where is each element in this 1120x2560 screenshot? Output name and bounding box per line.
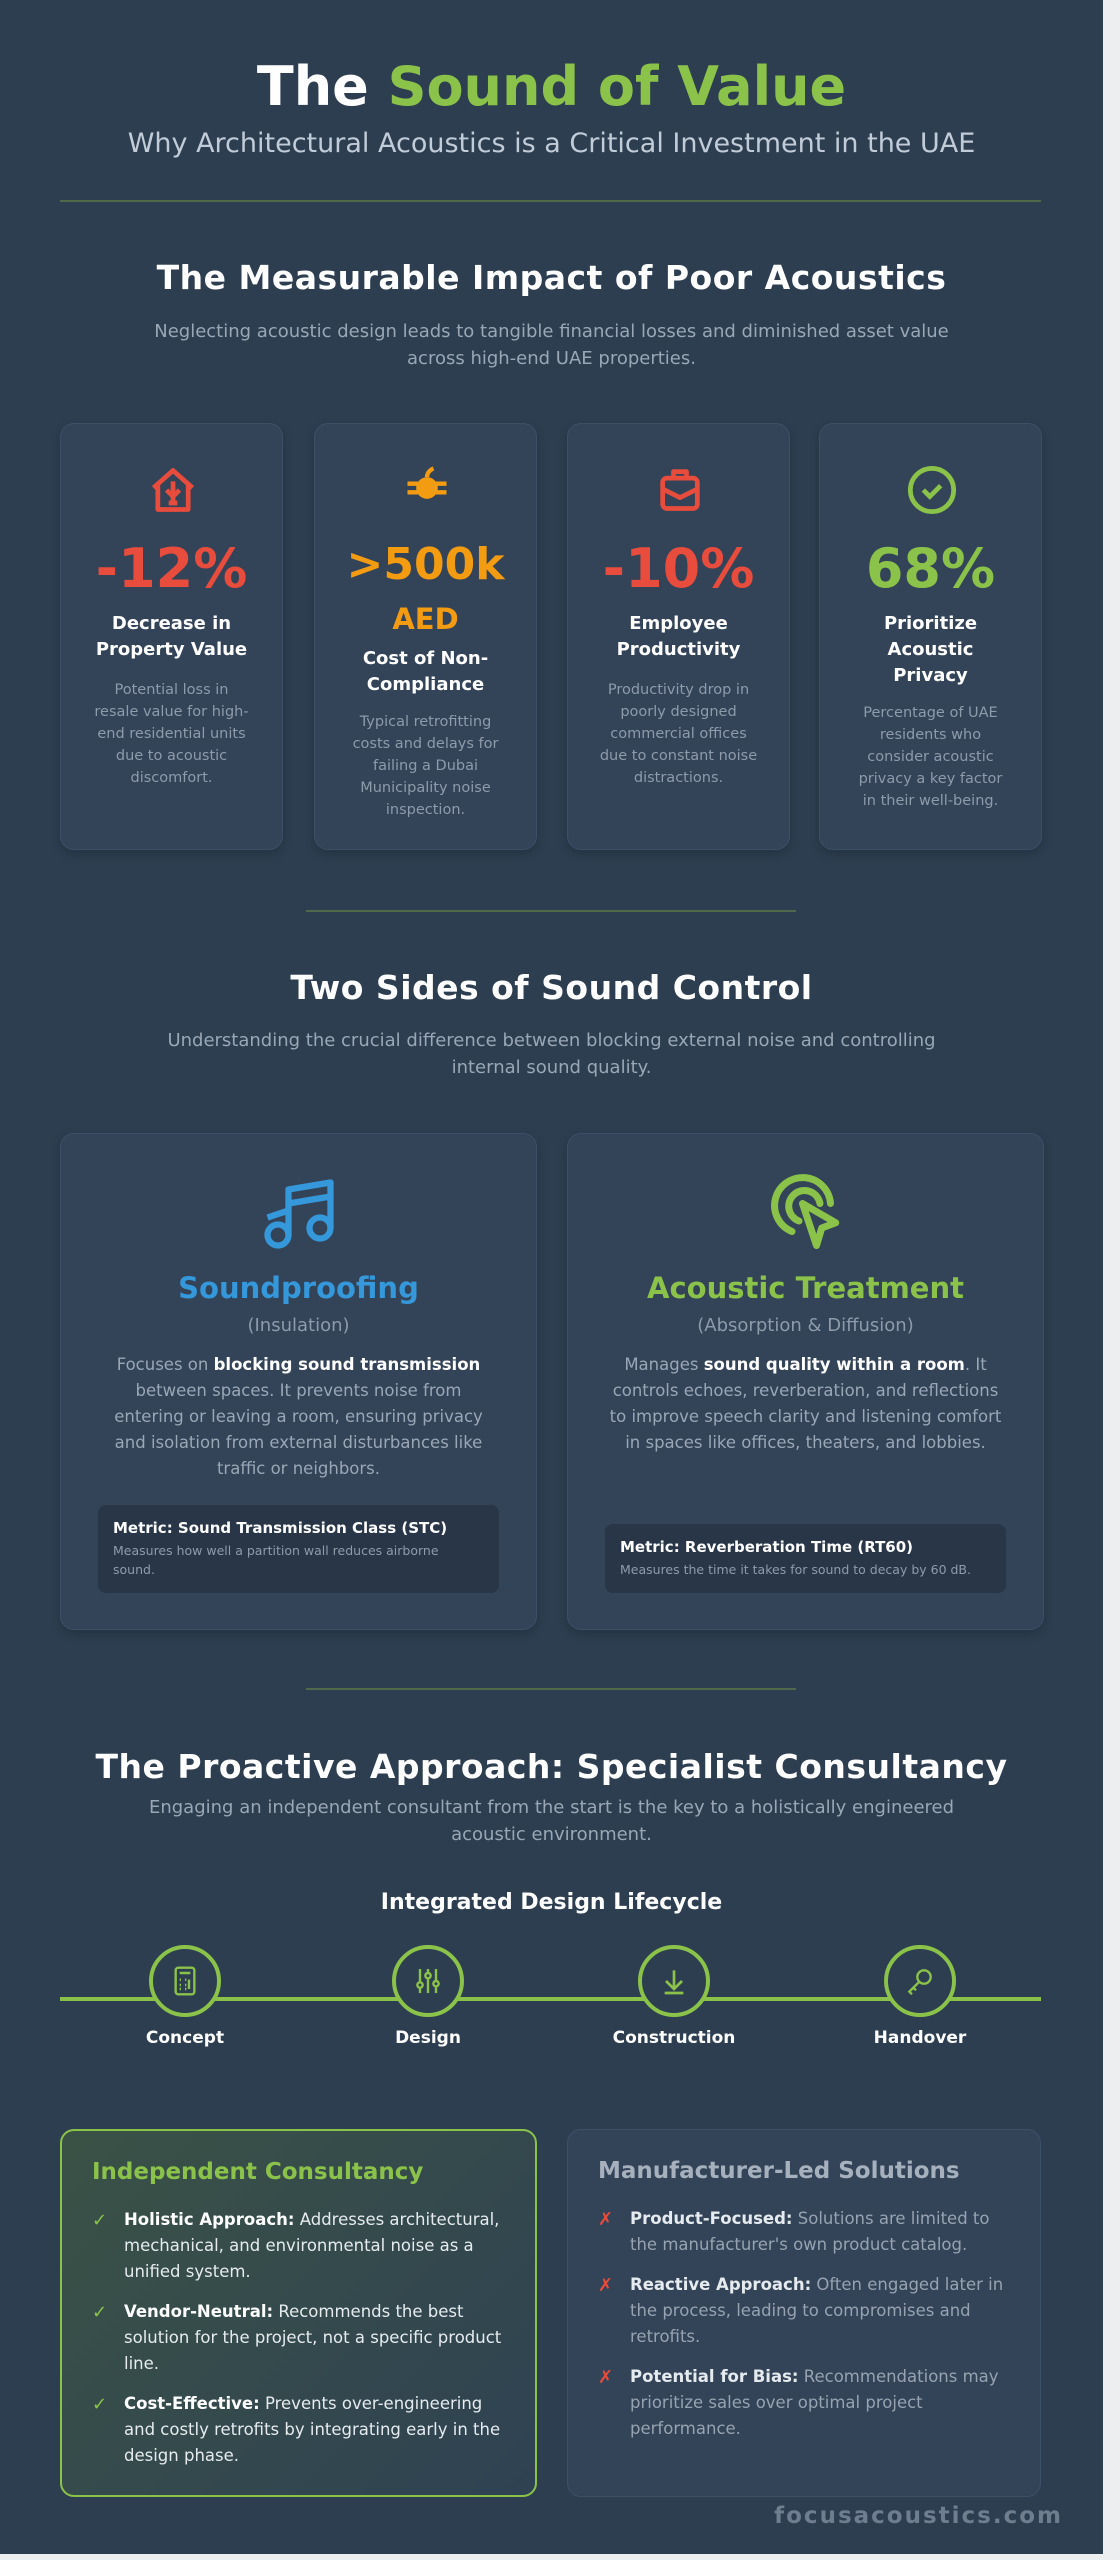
number: AED	[392, 602, 459, 636]
panel: stat productivity	[567, 423, 790, 850]
number: -10%	[603, 537, 754, 600]
list: Holistic Approach: Addresses architectural, mechanical, and environmental noise as a unified system.	[124, 2210, 499, 2281]
panel: soundproofing	[60, 1133, 537, 1630]
subtitle: Why Architectural Acoustics is a Critical Investment in the UAE	[128, 128, 975, 159]
title: The Sound of Value	[257, 55, 846, 118]
step labels: Design	[395, 2028, 461, 2048]
step: design	[392, 1945, 464, 2017]
panel: manufacturer-led	[567, 2129, 1041, 2497]
panel: stat privacy	[819, 423, 1042, 850]
timeline	[60, 1997, 1041, 2001]
list: Product-Focused: Solutions are limited to the manufacturer's own product catalog.	[630, 2209, 990, 2254]
heading: Manufacturer-Led Solutions	[598, 2158, 960, 2184]
step: construction	[638, 1945, 710, 2017]
number: >500k	[346, 539, 504, 590]
text: Percentage of UAE residents who consider acoustic privacy a key factor in their well-being.	[859, 705, 1002, 809]
step labels	[146, 2028, 966, 2048]
step: handover	[884, 1945, 956, 2017]
label: Employee Productivity	[617, 613, 740, 660]
text: Manages sound quality within a room. It controls echoes, reverberation, and reflections to improve speech clarity and listening comfort in spaces like offices, theaters, and lobbies.	[610, 1355, 1001, 1452]
step labels: Construction	[613, 2028, 735, 2048]
list	[92, 2210, 501, 2465]
subtitle: (Absorption & Diffusion)	[697, 1315, 914, 1336]
icon: house	[152, 468, 194, 512]
step labels: Concept	[146, 2028, 224, 2048]
metric box: Metric: Sound Transmission Class (STC)	[113, 1519, 447, 1537]
text: proactive intro: Engaging an independent consultant from the start is the key to a holistically engineered acoustic environment.	[149, 1797, 954, 1845]
step: concept	[149, 1945, 221, 2017]
icon: briefcase	[660, 469, 700, 511]
metric box: Measures how well a partition wall reduces airborne sound.	[113, 1543, 439, 1577]
heading: Independent Consultancy	[92, 2159, 423, 2185]
metric box	[98, 1505, 499, 1593]
list	[598, 2209, 1003, 2438]
heading: lifecycle: Integrated Design Lifecycle	[381, 1890, 722, 1915]
list: ✓	[92, 2394, 107, 2415]
text: Focuses on blocking sound transmission between spaces. It prevents noise from entering or leaving a room, ensuring privacy and isolation from external disturbances like traffic or neighbors.	[114, 1355, 483, 1478]
metric box: Measures the time it takes for sound to decay by 60 dB.	[620, 1562, 971, 1577]
icon: music note	[264, 1179, 334, 1249]
panel: stat compliance	[314, 423, 537, 850]
list: Reactive Approach: Often engaged later in the process, leading to compromises and retrofits.	[630, 2275, 1003, 2346]
list: Vendor-Neutral: Recommends the best solution for the project, not a specific product line.	[124, 2302, 501, 2373]
subtitle: (Insulation)	[247, 1315, 350, 1336]
icon: plug	[408, 466, 446, 499]
list: ✓	[92, 2210, 107, 2231]
number: 68%	[866, 537, 995, 600]
metric box	[605, 1524, 1006, 1593]
heading: Acoustic Treatment	[647, 1271, 964, 1305]
panel: acoustic treatment	[567, 1133, 1044, 1630]
label: Decrease in Property Value	[96, 613, 247, 660]
heading: proactive approach: The Proactive Approach: Specialist Consultancy	[96, 1747, 1007, 1786]
text: Typical retrofitting costs and delays for failing a Dubai Municipality noise inspection.	[353, 714, 498, 818]
list: ✗	[598, 2367, 613, 2388]
icon: target pointer	[771, 1174, 840, 1249]
text: Productivity drop in poorly designed commercial offices due to constant noise distractions.	[600, 682, 757, 786]
step labels: Handover	[874, 2028, 966, 2048]
text: two sides intro: Understanding the crucial difference between blocking external noise and controlling internal sound quality.	[167, 1030, 936, 1078]
text: impact intro: Neglecting acoustic design leads to tangible financial losses and diminished asset value across high-end UAE properties.	[154, 321, 949, 369]
list: ✓	[92, 2302, 107, 2323]
heading: measurable impact: The Measurable Impact of Poor Acoustics	[157, 258, 946, 297]
list: Cost-Effective: Prevents over-engineering and costly retrofits by integrating early in the design phase.	[124, 2394, 500, 2465]
list: ✗	[598, 2209, 613, 2230]
number: -12%	[96, 537, 247, 600]
number	[346, 539, 506, 636]
icon: check circle	[908, 466, 956, 514]
heading: two sides: Two Sides of Sound Control	[290, 968, 813, 1007]
panel: stat property value	[60, 423, 283, 850]
list: ✗	[598, 2275, 613, 2296]
label: Cost of Non-Compliance	[363, 648, 488, 695]
footer: website: focusacoustics.com	[774, 2503, 1063, 2529]
label: Prioritize Acoustic Privacy	[884, 613, 977, 686]
metric box: Metric: Reverberation Time (RT60)	[620, 1538, 913, 1556]
list: Potential for Bias: Recommendations may prioritize sales over optimal project performance.	[630, 2367, 999, 2438]
text: Potential loss in resale value for high-end residential units due to acoustic discomfort.	[94, 682, 249, 786]
heading: Soundproofing	[178, 1271, 419, 1305]
panel: independent consultancy	[60, 2129, 537, 2497]
